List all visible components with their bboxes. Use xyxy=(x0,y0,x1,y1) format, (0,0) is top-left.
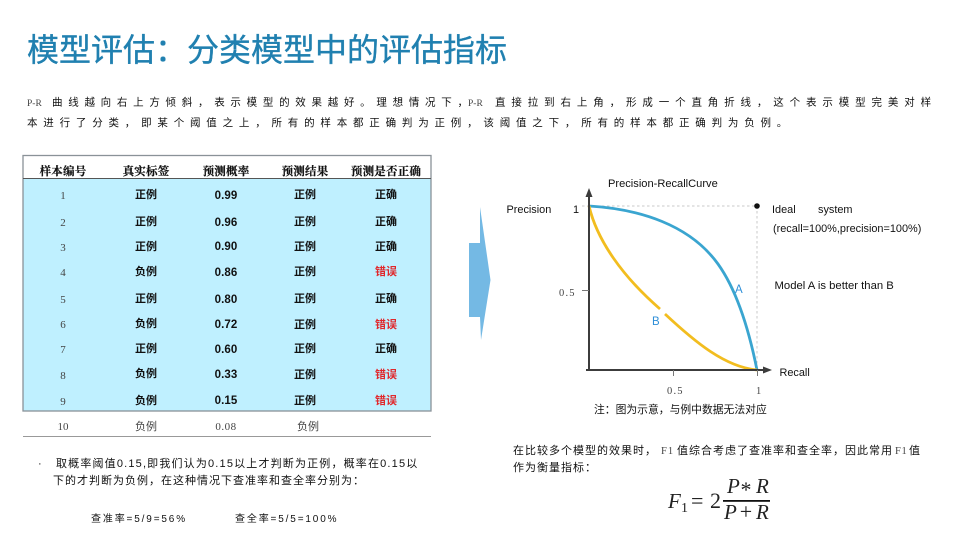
row 5: 5 xyxy=(60,294,66,306)
row 5: 正例 xyxy=(135,291,157,305)
ideal system label: (recall=100%,precision=100%) xyxy=(773,223,921,235)
row 2: 0.96 xyxy=(215,217,237,229)
F1 explanation xyxy=(513,443,920,474)
row 1 xyxy=(60,187,397,202)
F1 explanation: 作为衡量指标： xyxy=(513,460,597,474)
ideal reference lines xyxy=(582,206,757,370)
row 4: 正例 xyxy=(294,264,316,278)
axis labels: 0.5 xyxy=(667,386,684,397)
row 6 xyxy=(60,316,397,331)
axis labels: Precision xyxy=(506,204,551,216)
intro paragraph: 本进行了分类，即某个阈值之上，所有的样本都正确判为正例，该阈值之下，所有的样本都正确判为负例。 xyxy=(27,116,793,129)
row 7: 正例 xyxy=(135,341,157,355)
axes xyxy=(582,188,772,376)
row 9: 错误 xyxy=(375,393,397,407)
row 7: 0.60 xyxy=(215,344,237,356)
F1 formula: 1 xyxy=(681,501,688,516)
ideal system point xyxy=(754,203,760,209)
table header: 样本编号 xyxy=(40,164,87,178)
F1 explanation: 值 xyxy=(909,444,920,457)
axis labels: 1 xyxy=(756,386,761,397)
row 9: 0.15 xyxy=(215,395,238,407)
F1 formula xyxy=(667,474,770,524)
row 5: 0.80 xyxy=(215,294,237,306)
row 9: 9 xyxy=(60,396,66,408)
data table xyxy=(23,156,431,436)
model comparison label: Model A is better than B xyxy=(774,280,894,292)
ideal system label: system xyxy=(818,204,852,216)
row 4: 错误 xyxy=(375,264,397,278)
row 8: 正例 xyxy=(294,367,316,381)
intro paragraph: 直接拉到右上角，形成一个直角折线，这个表示模型完美对样 xyxy=(495,96,937,108)
precision and recall results: 查全率=5/5=100% xyxy=(235,512,338,525)
row 5: 正例 xyxy=(294,291,316,305)
F1 formula: P xyxy=(726,474,740,498)
row 1: 1 xyxy=(60,190,66,202)
row 8: 0.33 xyxy=(215,369,237,381)
intro paragraph: 曲线越向右上方倾斜，表示模型的效果越好。理想情况下， xyxy=(52,96,474,108)
chart: precision-recall curve xyxy=(506,178,921,416)
row 5 xyxy=(60,291,397,306)
F1 formula: + xyxy=(740,499,752,524)
row 5: 正确 xyxy=(375,292,397,305)
row 9 xyxy=(60,393,397,408)
F1 formula: = xyxy=(691,488,703,513)
F1 formula: F xyxy=(667,489,681,513)
intro paragraph: P-R xyxy=(27,99,42,109)
row 4: 0.86 xyxy=(215,267,237,279)
row 3: 3 xyxy=(60,242,66,254)
intro paragraph xyxy=(27,96,937,129)
row 7: 正确 xyxy=(375,342,397,355)
row 9: 正例 xyxy=(294,393,316,407)
row 10: 10 xyxy=(58,421,69,433)
row 4 xyxy=(60,264,397,279)
F1 formula: R xyxy=(755,474,769,498)
row 8: 错误 xyxy=(375,367,397,381)
axis labels: 1 xyxy=(573,204,579,216)
row 9: 负例 xyxy=(135,393,157,407)
F1 explanation: 值综合考虑了查准率和查全率，因此常用 xyxy=(677,443,893,457)
axis labels xyxy=(506,204,810,397)
title: 模型评估：分类模型中的评估指标 xyxy=(27,32,507,68)
row 1: 正确 xyxy=(375,188,397,201)
threshold explanation xyxy=(38,456,418,487)
precision and recall results: 查准率=5/9=56% xyxy=(91,512,187,525)
table header: 真实标签 xyxy=(123,164,170,178)
curve A xyxy=(589,206,757,370)
row 4: 4 xyxy=(60,267,66,279)
row 3: 0.90 xyxy=(215,241,237,253)
row 10: 0.08 xyxy=(215,421,237,433)
row 6: 负例 xyxy=(135,316,157,330)
table header xyxy=(40,164,421,178)
row 6: 6 xyxy=(60,319,66,331)
chart note: 注：图为示意，与例中数据无法对应 xyxy=(594,402,767,416)
threshold explanation: · xyxy=(38,458,42,470)
row 2 xyxy=(60,214,397,229)
intro paragraph: P-R xyxy=(468,99,483,109)
table header: 预测是否正确 xyxy=(351,164,421,178)
row 8: 8 xyxy=(60,370,66,382)
row 7: 正例 xyxy=(294,341,316,355)
row 2: 正例 xyxy=(294,214,316,228)
arrow: table to chart xyxy=(469,207,490,340)
axis labels: Recall xyxy=(780,367,810,379)
threshold explanation: 取概率阈值0.15,即我们认为0.15以上才判断为正例，概率在0.15以 xyxy=(56,456,418,470)
F1 explanation: F1 xyxy=(895,446,907,457)
row 3 xyxy=(60,239,397,254)
row 2: 正例 xyxy=(135,214,157,228)
row 8: 负例 xyxy=(135,366,157,380)
table frame xyxy=(23,156,431,411)
threshold explanation: 下的才判断为负例，在这种情况下查准率和查全率分别为： xyxy=(53,473,365,487)
table highlighted body xyxy=(23,179,431,411)
curve labels: A xyxy=(735,284,743,296)
row 10: 负例 xyxy=(297,419,319,433)
row 10 xyxy=(58,419,319,433)
table header: 预测结果 xyxy=(282,164,329,178)
row 6: 错误 xyxy=(375,317,397,331)
ideal system label xyxy=(772,204,921,235)
row 3: 正确 xyxy=(375,240,397,253)
row 7: 7 xyxy=(60,344,66,356)
row 2: 2 xyxy=(60,217,66,229)
F1 explanation: 在比较多个模型的效果时， xyxy=(513,443,657,457)
curve labels xyxy=(652,284,743,328)
row 1: 0.99 xyxy=(215,190,237,202)
ideal system label: Ideal xyxy=(772,204,796,216)
row 7 xyxy=(60,341,397,356)
F1 formula: R xyxy=(755,500,769,524)
F1 formula: 2 xyxy=(710,488,721,513)
axis labels: 0.5 xyxy=(559,288,576,299)
row 8 xyxy=(60,366,397,382)
F1 formula: P xyxy=(723,500,737,524)
row 6: 0.72 xyxy=(215,319,237,331)
row 4: 负例 xyxy=(135,264,157,278)
F1 explanation: F1 xyxy=(661,446,674,457)
row 2: 正确 xyxy=(375,215,397,228)
table header: 预测概率 xyxy=(203,164,250,178)
curve B xyxy=(589,206,757,370)
row 10: 负例 xyxy=(135,419,157,433)
row 1: 正例 xyxy=(294,187,316,201)
row 6: 正例 xyxy=(294,317,316,331)
precision and recall results xyxy=(91,512,338,525)
F1 formula: * xyxy=(740,477,752,502)
row 3: 正例 xyxy=(294,239,316,253)
row 3: 正例 xyxy=(135,239,157,253)
row 1: 正例 xyxy=(135,187,157,201)
curve labels: B xyxy=(652,316,660,328)
chart title: Precision-RecallCurve xyxy=(608,178,718,190)
